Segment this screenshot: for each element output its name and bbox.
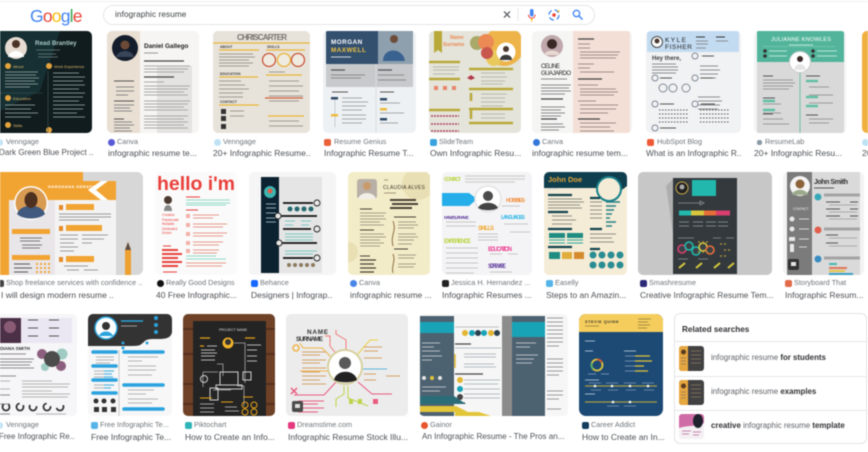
thumbnail: Education — [13, 96, 31, 101]
title: Designers | Infograp... — [251, 290, 333, 300]
row thumbnail — [679, 346, 704, 371]
logo: Google: Google — [30, 6, 82, 26]
card: Storyboard That John Smith — [784, 171, 864, 300]
thumbnail: NAME — [307, 329, 329, 336]
source: Easelly — [555, 278, 579, 287]
thumbnail: EXPERIENCE — [444, 239, 471, 245]
top divider line — [0, 1, 868, 2]
title: 20+ Infographic Resu... — [754, 148, 842, 158]
thumbnail: FISHER — [665, 44, 692, 51]
card: Free Infographic Templates — [87, 313, 173, 442]
favicon — [288, 422, 295, 429]
title: 40 Free Infographic... — [156, 290, 237, 300]
row divider — [675, 341, 866, 342]
thumbnail: SURNAME — [296, 336, 324, 343]
thumbnail — [183, 314, 275, 416]
panel: related searches — [674, 313, 867, 444]
card: Dreamstime stock illustration — [286, 314, 409, 442]
row divider — [675, 376, 866, 377]
thumbnail: Hey there, — [652, 56, 681, 62]
title: How to Create an Info... — [185, 432, 275, 442]
favicon — [430, 139, 437, 146]
row text: infographic resume examples — [711, 387, 816, 396]
thumbnail: CONTACT — [444, 177, 461, 183]
source: ResumeLab — [765, 137, 804, 146]
thumbnail: GUAJARDO — [541, 71, 571, 77]
source: Career Addict — [591, 420, 635, 429]
thumbnail: CONTACT — [220, 100, 238, 104]
title: Infographic Resume T... — [324, 148, 414, 158]
title: Free Infographic Te... — [91, 432, 171, 442]
thumbnail — [0, 171, 144, 276]
card: Venngage dark green resume — [0, 30, 94, 158]
favicon — [0, 422, 3, 429]
title: I will design modern resume ... — [1, 290, 113, 300]
card: Easelly John Doe — [543, 171, 628, 300]
favicon — [157, 280, 164, 287]
favicon — [640, 280, 647, 287]
row: examples — [675, 376, 866, 410]
card: Venngage Chris Carter — [212, 30, 311, 158]
thumbnail: CONTACT — [793, 207, 809, 211]
source: Canva — [117, 137, 138, 146]
thumbnail: JULIANNE KNOWLES — [771, 37, 831, 43]
title: Infographic Resume Stock Illu... — [288, 432, 408, 442]
thumbnail: John Doe — [548, 175, 582, 184]
thumbnail: Driven — [162, 231, 172, 235]
search query: infographic resume — [115, 10, 186, 19]
favicon — [647, 139, 654, 146]
card: Really Good Designs hello i'm — [156, 173, 237, 300]
thumbnail — [106, 30, 198, 134]
source: Canva — [359, 278, 380, 287]
card: clipped orange resume — [861, 30, 868, 158]
thumbnail: SKILLS — [267, 45, 280, 49]
source: Shop freelance services with confidence ... — [6, 278, 143, 287]
thumbnail: Daniel Gallego — [144, 43, 188, 50]
thumbnail: EDUCATION — [488, 247, 512, 253]
card: ResumeLab Julianne Knowles — [754, 30, 846, 158]
title: Own Infographic Resu... — [430, 148, 521, 158]
thumbnail: CELINE — [541, 64, 560, 70]
source: Resume Genius — [334, 137, 386, 146]
thumbnail: ABOUT — [220, 45, 233, 49]
card: Resume Genius Morgan Maxwell — [323, 30, 416, 158]
thumbnail: Creative — [162, 213, 175, 217]
title: Infographic Resumes ... — [442, 290, 532, 300]
row thumbnail — [679, 380, 704, 405]
favicon — [0, 280, 4, 287]
thumbnail: Dedicated — [162, 227, 177, 231]
card: Canva Claudia Alves — [348, 172, 432, 300]
thumbnail: PROJECT NAME — [219, 328, 248, 332]
favicon — [442, 280, 449, 287]
title: Creative Infographic Resume Tem... — [640, 290, 773, 300]
title: How to Create an In... — [582, 432, 664, 442]
row divider — [675, 410, 866, 411]
favicon — [546, 280, 553, 287]
thumbnail — [441, 172, 532, 274]
source: Smashresume — [649, 278, 696, 287]
thumbnail — [862, 31, 868, 133]
thumbnail — [0, 30, 93, 134]
card: Canva Daniel Gallego — [106, 30, 198, 158]
favicon — [757, 140, 762, 145]
row text: creative infographic resume template — [711, 421, 845, 430]
title: What is an Infographic R... — [646, 148, 742, 158]
thumbnail: Surname — [443, 42, 465, 48]
favicon — [785, 280, 792, 287]
thumbnail: Skills — [13, 123, 22, 128]
thumbnail: SKILLS — [478, 226, 494, 232]
thumbnail: NAME SURNAME — [444, 215, 470, 221]
thumbnail — [87, 313, 173, 416]
card: Jessica H. Hernandez — [441, 172, 532, 300]
title: An Infographic Resume - The Pros an... — [422, 432, 564, 441]
title: infographic resume tem... — [532, 148, 628, 158]
card: SlideTeam infographic — [428, 30, 522, 158]
source: Behance — [260, 278, 289, 287]
thumbnail — [754, 30, 846, 134]
panel heading: Related searches — [682, 325, 749, 334]
source: Dreamstime.com — [297, 420, 352, 429]
card: HubSpot Kyle Fisher — [646, 30, 742, 158]
favicon — [533, 139, 540, 146]
thumbnail — [532, 30, 632, 134]
thumbnail: Name — [450, 35, 464, 41]
thumbnail: Read Brantley — [35, 40, 77, 47]
favicon — [582, 422, 589, 429]
thumbnail: hello i'm — [157, 173, 235, 195]
card: Shop freelance Harshana — [0, 171, 144, 300]
favicon — [862, 139, 868, 146]
source: Venngage — [6, 420, 39, 429]
thumbnail: Reliable — [162, 222, 174, 226]
search box icons — [503, 8, 584, 22]
title: Steps to an Amazin... — [546, 290, 626, 300]
favicon — [185, 422, 192, 429]
thumbnail: LANGUAGES — [501, 215, 525, 221]
thumbnail — [0, 314, 76, 416]
thumbnail: John Smith — [814, 179, 848, 186]
thumbnail — [543, 171, 628, 276]
thumbnail: MORGAN — [331, 39, 363, 46]
card: Smashresume creative — [638, 172, 774, 300]
thumbnail: STEVIE QUINN — [585, 320, 619, 324]
source: Storyboard That — [794, 278, 846, 287]
thumbnail — [784, 171, 864, 276]
thumbnail — [638, 172, 772, 276]
thumbnail: HARSHANA HERATH — [48, 184, 96, 189]
card: Career Addict Stevie Quinn — [579, 314, 664, 442]
thumbnail — [348, 172, 430, 276]
favicon — [108, 139, 115, 146]
favicon — [91, 422, 98, 429]
thumbnail: KYLE — [665, 37, 687, 44]
favicon — [421, 422, 428, 429]
thumbnail — [250, 172, 336, 274]
favicon — [0, 139, 3, 146]
thumbnail: Passionate — [162, 218, 179, 222]
thumbnail — [157, 173, 235, 274]
thumbnail: CHRISCARTER — [237, 33, 287, 42]
thumbnail: MAXWELL — [331, 47, 366, 54]
card: Canva Celine Guajardo — [532, 30, 632, 158]
thumbnail: HOBBIES — [506, 198, 525, 204]
title: 20+ Infographic Resume... — [213, 148, 311, 158]
row text: infographic resume for students — [711, 353, 826, 362]
title: infographic resume ... — [350, 290, 431, 300]
row: for students — [675, 342, 866, 376]
source: Gainor — [430, 420, 452, 429]
row: creative template — [675, 410, 866, 443]
source: HubSpot Blog — [657, 137, 702, 146]
card: Piktochart wood poster — [182, 313, 276, 442]
thumbnail — [579, 314, 663, 416]
thumbnail: CLAUDIA ALVES — [383, 185, 426, 191]
source: Free Infographic Te... — [100, 420, 169, 429]
favicon — [324, 139, 331, 146]
card: Behance designers — [250, 172, 336, 300]
thumbnail: Work Experience — [54, 64, 85, 69]
source: Venngage — [6, 137, 39, 146]
source: Piktochart — [194, 420, 226, 429]
source: Really Good Designs — [166, 278, 235, 287]
title: infographic resume te... — [108, 148, 197, 158]
card: Gainor pros and cons — [419, 314, 569, 442]
search box — [103, 5, 595, 25]
source: Jessica H. Hernandez ... — [451, 278, 530, 287]
thumbnail: SOFTWARE — [488, 264, 506, 270]
favicon — [214, 139, 221, 146]
thumbnail — [419, 314, 568, 416]
favicon — [251, 280, 258, 287]
thumbnail — [428, 30, 522, 134]
thumbnail — [212, 30, 311, 134]
thumbnail — [323, 30, 416, 134]
source: Canva — [542, 137, 563, 146]
row thumbnail — [679, 414, 704, 439]
thumbnail: DIANA SMITH — [0, 346, 31, 351]
source: Venngage — [223, 137, 256, 146]
thumbnail — [646, 30, 741, 133]
card: Venngage Diana Smith — [0, 314, 76, 442]
thumbnail — [286, 314, 408, 416]
favicon — [350, 280, 357, 287]
thumbnail: About — [13, 64, 24, 69]
thumbnail: EDUCATION — [220, 72, 241, 76]
source: SlideTeam — [439, 137, 473, 146]
title: Infographic Resum... — [785, 290, 863, 300]
